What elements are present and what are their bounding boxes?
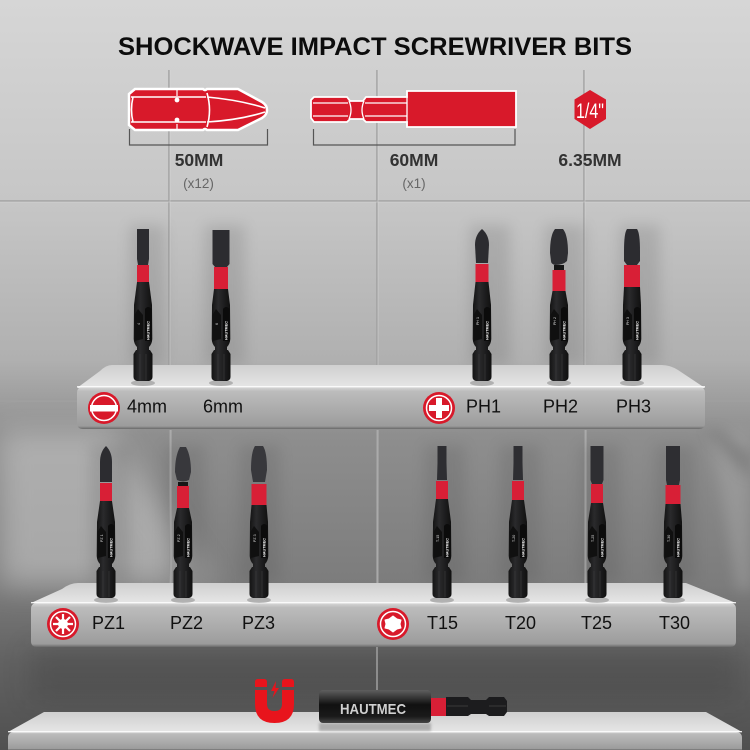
bit: PH2: PH 2 (553, 317, 557, 325)
label: 4mm: 4mm (127, 396, 167, 416)
bit: T20: HAUTMEC (522, 538, 526, 557)
icon: Phillips badge (423, 392, 455, 424)
bit: PH2 (547, 229, 571, 386)
bit: T15: HAUTMEC (446, 538, 450, 557)
diagram: 60mm bit (311, 91, 516, 127)
label: T25: T25 (581, 613, 612, 633)
bit: T15: T-15 (436, 535, 440, 542)
label: 60MM: 60MM (390, 150, 438, 170)
bit: PZ3: HAUTMEC (262, 538, 266, 557)
icon: Pozidriv badge (47, 608, 79, 640)
icon: slotted badge (88, 392, 120, 424)
bit: PH3: PH 3 (626, 317, 630, 325)
icon: Torx badge (377, 608, 409, 640)
icon: magnet (255, 679, 294, 723)
bit: PH1 (470, 229, 494, 386)
bit: PZ1 (94, 446, 118, 603)
bit: slotted 4mm (131, 229, 155, 386)
label: 6mm: 6mm (203, 396, 243, 416)
label: T20: T20 (505, 613, 536, 633)
bit: PH3: HAUTMEC (636, 321, 640, 340)
bit: slotted 6mm: 6 (215, 323, 219, 325)
label: x12: (x12) (183, 176, 214, 191)
title: SHOCKWAVE IMPACT SCREWRIVER BITS (118, 33, 632, 61)
bit: T30: HAUTMEC (676, 538, 680, 557)
bit: slotted 4mm: HAUTMEC (146, 321, 150, 340)
label: T15: T15 (427, 613, 458, 633)
label: PZ1: PZ1 (92, 613, 125, 633)
label: x1: (x1) (402, 176, 426, 191)
label: PH3: PH3 (616, 396, 651, 416)
bit: PH2: HAUTMEC (562, 321, 566, 340)
brand text: HAUTMEC (340, 701, 406, 718)
bit: PZ2 (171, 447, 195, 603)
bit: PZ2: HAUTMEC (186, 538, 190, 557)
shelf 2 (31, 583, 736, 647)
bit: PH3 (620, 229, 644, 386)
bit: slotted 6mm: HAUTMEC (224, 321, 228, 340)
icon: hex 1/4 inch: 1/4" (576, 100, 604, 123)
bit: PZ3 (247, 446, 271, 603)
bit: T25: HAUTMEC (600, 538, 604, 557)
magnetic holder (319, 690, 507, 731)
bit: T20 (506, 446, 530, 603)
label: PH1: PH1 (466, 396, 501, 416)
diagram: 50mm bit (129, 89, 267, 130)
label: T30: T30 (659, 613, 690, 633)
bracket: 50mm (130, 129, 268, 145)
bit: PZ1: HAUTMEC (110, 538, 114, 557)
shelf 1 (77, 365, 705, 429)
label: PZ2: PZ2 (170, 613, 203, 633)
bracket: 60mm (314, 129, 515, 145)
bit: slotted 4mm: 4 (137, 323, 141, 325)
label: PZ3: PZ3 (242, 613, 275, 633)
bit: PH1: HAUTMEC (486, 321, 490, 340)
bit: T25 (585, 446, 609, 603)
bit: slotted 6mm (209, 230, 233, 386)
bit: PH1: PH 1 (476, 317, 480, 325)
icon: hex 1/4 inch (574, 90, 606, 129)
label: 50MM: 50MM (175, 150, 223, 170)
bit: T15 (430, 446, 454, 603)
bit: T30 (661, 446, 685, 603)
bit: T25: T-25 (591, 535, 595, 542)
bit: T30: T-30 (667, 535, 671, 542)
shelf 3 (8, 712, 742, 750)
label: 6.35MM: 6.35MM (558, 150, 622, 170)
bit: T20: T-20 (512, 535, 516, 542)
bit: PZ1: PZ 1 (100, 534, 104, 542)
bit: PZ2: PZ 2 (177, 534, 181, 542)
label: PH2: PH2 (543, 396, 578, 416)
bit: PZ3: PZ 3 (253, 534, 257, 542)
